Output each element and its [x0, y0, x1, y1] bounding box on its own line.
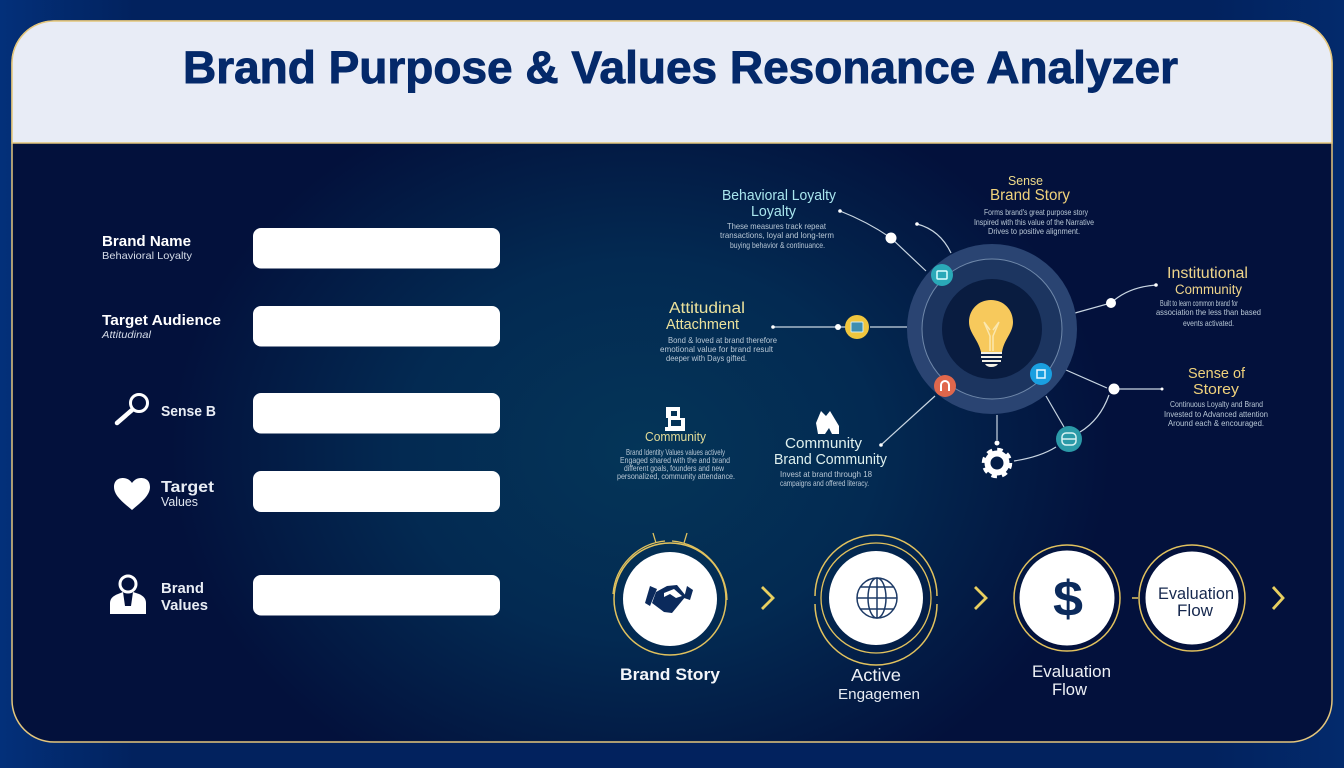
field: target values: Target	[161, 479, 214, 496]
radial diagram	[617, 174, 1268, 488]
label: institutional community: events activated.	[1183, 318, 1234, 328]
connector	[1132, 597, 1138, 599]
step: active engagement	[815, 535, 937, 703]
label: sense of story: Storey	[1193, 381, 1240, 398]
label: sense of story: Invested to Advanced attention	[1164, 409, 1268, 419]
step: evaluation value	[1014, 545, 1120, 699]
label: behavioral loyalty: These measures track repeat	[727, 221, 827, 231]
label: brand community: Invest at brand through 18	[780, 469, 872, 479]
header band	[12, 21, 1332, 143]
step: evaluation value: Flow	[1052, 680, 1088, 699]
icon: handshake	[645, 585, 693, 613]
label: brand story: Inspired with this value of the Narrative	[974, 217, 1094, 227]
field: target audience: Attitudinal	[101, 329, 152, 341]
node: lower teal	[1056, 426, 1082, 452]
field: brand name	[102, 228, 500, 268]
label: institutional community: Institutional	[1167, 265, 1248, 282]
field: brand name: Brand Name	[102, 234, 191, 250]
field: target values: Values	[161, 495, 198, 509]
field: target audience	[101, 306, 500, 346]
icon: globe	[857, 578, 897, 618]
label: sense of story: Sense of	[1188, 365, 1246, 382]
label: brand story: Drives to positive alignment.	[988, 226, 1080, 236]
label: community: Community	[645, 430, 707, 444]
label: institutional community: Community	[1175, 282, 1242, 297]
step: brand story: Brand Story	[620, 666, 721, 684]
step: evaluation value: Evaluation	[1032, 662, 1111, 681]
label: attitudinal attachment: Bond & loved at brand therefore	[668, 335, 777, 345]
label: institutional community	[1156, 265, 1261, 328]
field: brand values: Brand	[161, 581, 204, 597]
label: brand community: Brand Community	[774, 452, 888, 468]
step: evaluation flow	[1139, 545, 1245, 651]
icon: gear	[984, 450, 1010, 476]
node: teal	[931, 264, 953, 286]
step: evaluation flow: Flow	[1177, 602, 1213, 620]
field: brand values: Values	[161, 598, 208, 614]
field: sense of brand	[117, 393, 500, 434]
label: sense of story	[1164, 365, 1268, 428]
label: attitudinal attachment	[660, 300, 777, 363]
connector lines	[773, 211, 1162, 461]
title: Brand Purpose & Values Resonance Analyzer	[183, 42, 1178, 93]
label: attitudinal attachment: emotional value for brand result	[660, 344, 774, 354]
evaluation flow	[613, 533, 1283, 703]
field: brand name: Behavioral Loyalty	[102, 250, 193, 262]
node: blue	[1030, 363, 1052, 385]
label: behavioral loyalty	[720, 188, 837, 250]
label: behavioral loyalty: Loyalty	[751, 204, 797, 220]
label: institutional community: association the less than based	[1156, 307, 1261, 317]
label: sense of story: Around each & encouraged.	[1168, 418, 1264, 428]
connector dots	[771, 209, 1164, 447]
label: brand community	[774, 411, 888, 488]
label: institutional community: Built to learn common brand for	[1160, 298, 1238, 308]
label: brand story: Sense	[1008, 174, 1043, 188]
field: brand values	[110, 575, 500, 616]
concentric rings	[907, 244, 1077, 414]
label: brand story: Forms brand's great purpose story	[984, 207, 1089, 217]
icon: person	[110, 576, 146, 614]
label: attitudinal attachment: Attitudinal	[669, 300, 745, 317]
field: sense of brand: Sense B	[161, 404, 216, 420]
label: community: Brand Identity Values values actively	[626, 447, 726, 457]
label: brand story	[974, 174, 1094, 236]
label: community: personalized, community attendance.	[617, 471, 735, 481]
node: orange	[934, 375, 956, 397]
node: yellow	[845, 315, 869, 339]
icon: light bulb	[969, 300, 1013, 367]
step: active engagement: Engagemen	[838, 686, 920, 703]
label: community: different goals, founders and new	[624, 463, 725, 473]
field: target values	[114, 471, 500, 512]
step: active engagement: Active	[851, 665, 901, 685]
label: sense of story: Continuous Loyalty and Brand	[1170, 399, 1263, 409]
label: brand story: Brand Story	[990, 187, 1070, 204]
icon: magnifier	[117, 394, 148, 423]
label: behavioral loyalty: buying behavior & continuance.	[730, 240, 825, 250]
input form	[101, 228, 500, 616]
icon: dollar: $	[1053, 571, 1083, 627]
icon: heart	[114, 478, 150, 510]
arrow	[762, 587, 773, 609]
label: community: Engaged shared with the and brand	[620, 455, 730, 465]
step: brand story	[613, 533, 727, 684]
label: attitudinal attachment: deeper with Days gifted.	[666, 353, 747, 363]
icon: building	[665, 407, 685, 431]
label: brand community: campaigns and offered literacy.	[780, 478, 869, 488]
label: community	[617, 407, 735, 481]
icon: community	[816, 411, 839, 434]
arrow	[1273, 587, 1283, 609]
label: brand community: Community	[785, 436, 863, 452]
field: target audience: Target Audience	[102, 312, 221, 329]
label: attitudinal attachment: Attachment	[666, 316, 740, 333]
label: behavioral loyalty: Behavioral Loyalty	[722, 188, 837, 204]
step: evaluation flow: Evaluation	[1158, 585, 1234, 603]
label: behavioral loyalty: transactions, loyal and long-term	[720, 230, 834, 240]
arrow	[975, 587, 986, 609]
